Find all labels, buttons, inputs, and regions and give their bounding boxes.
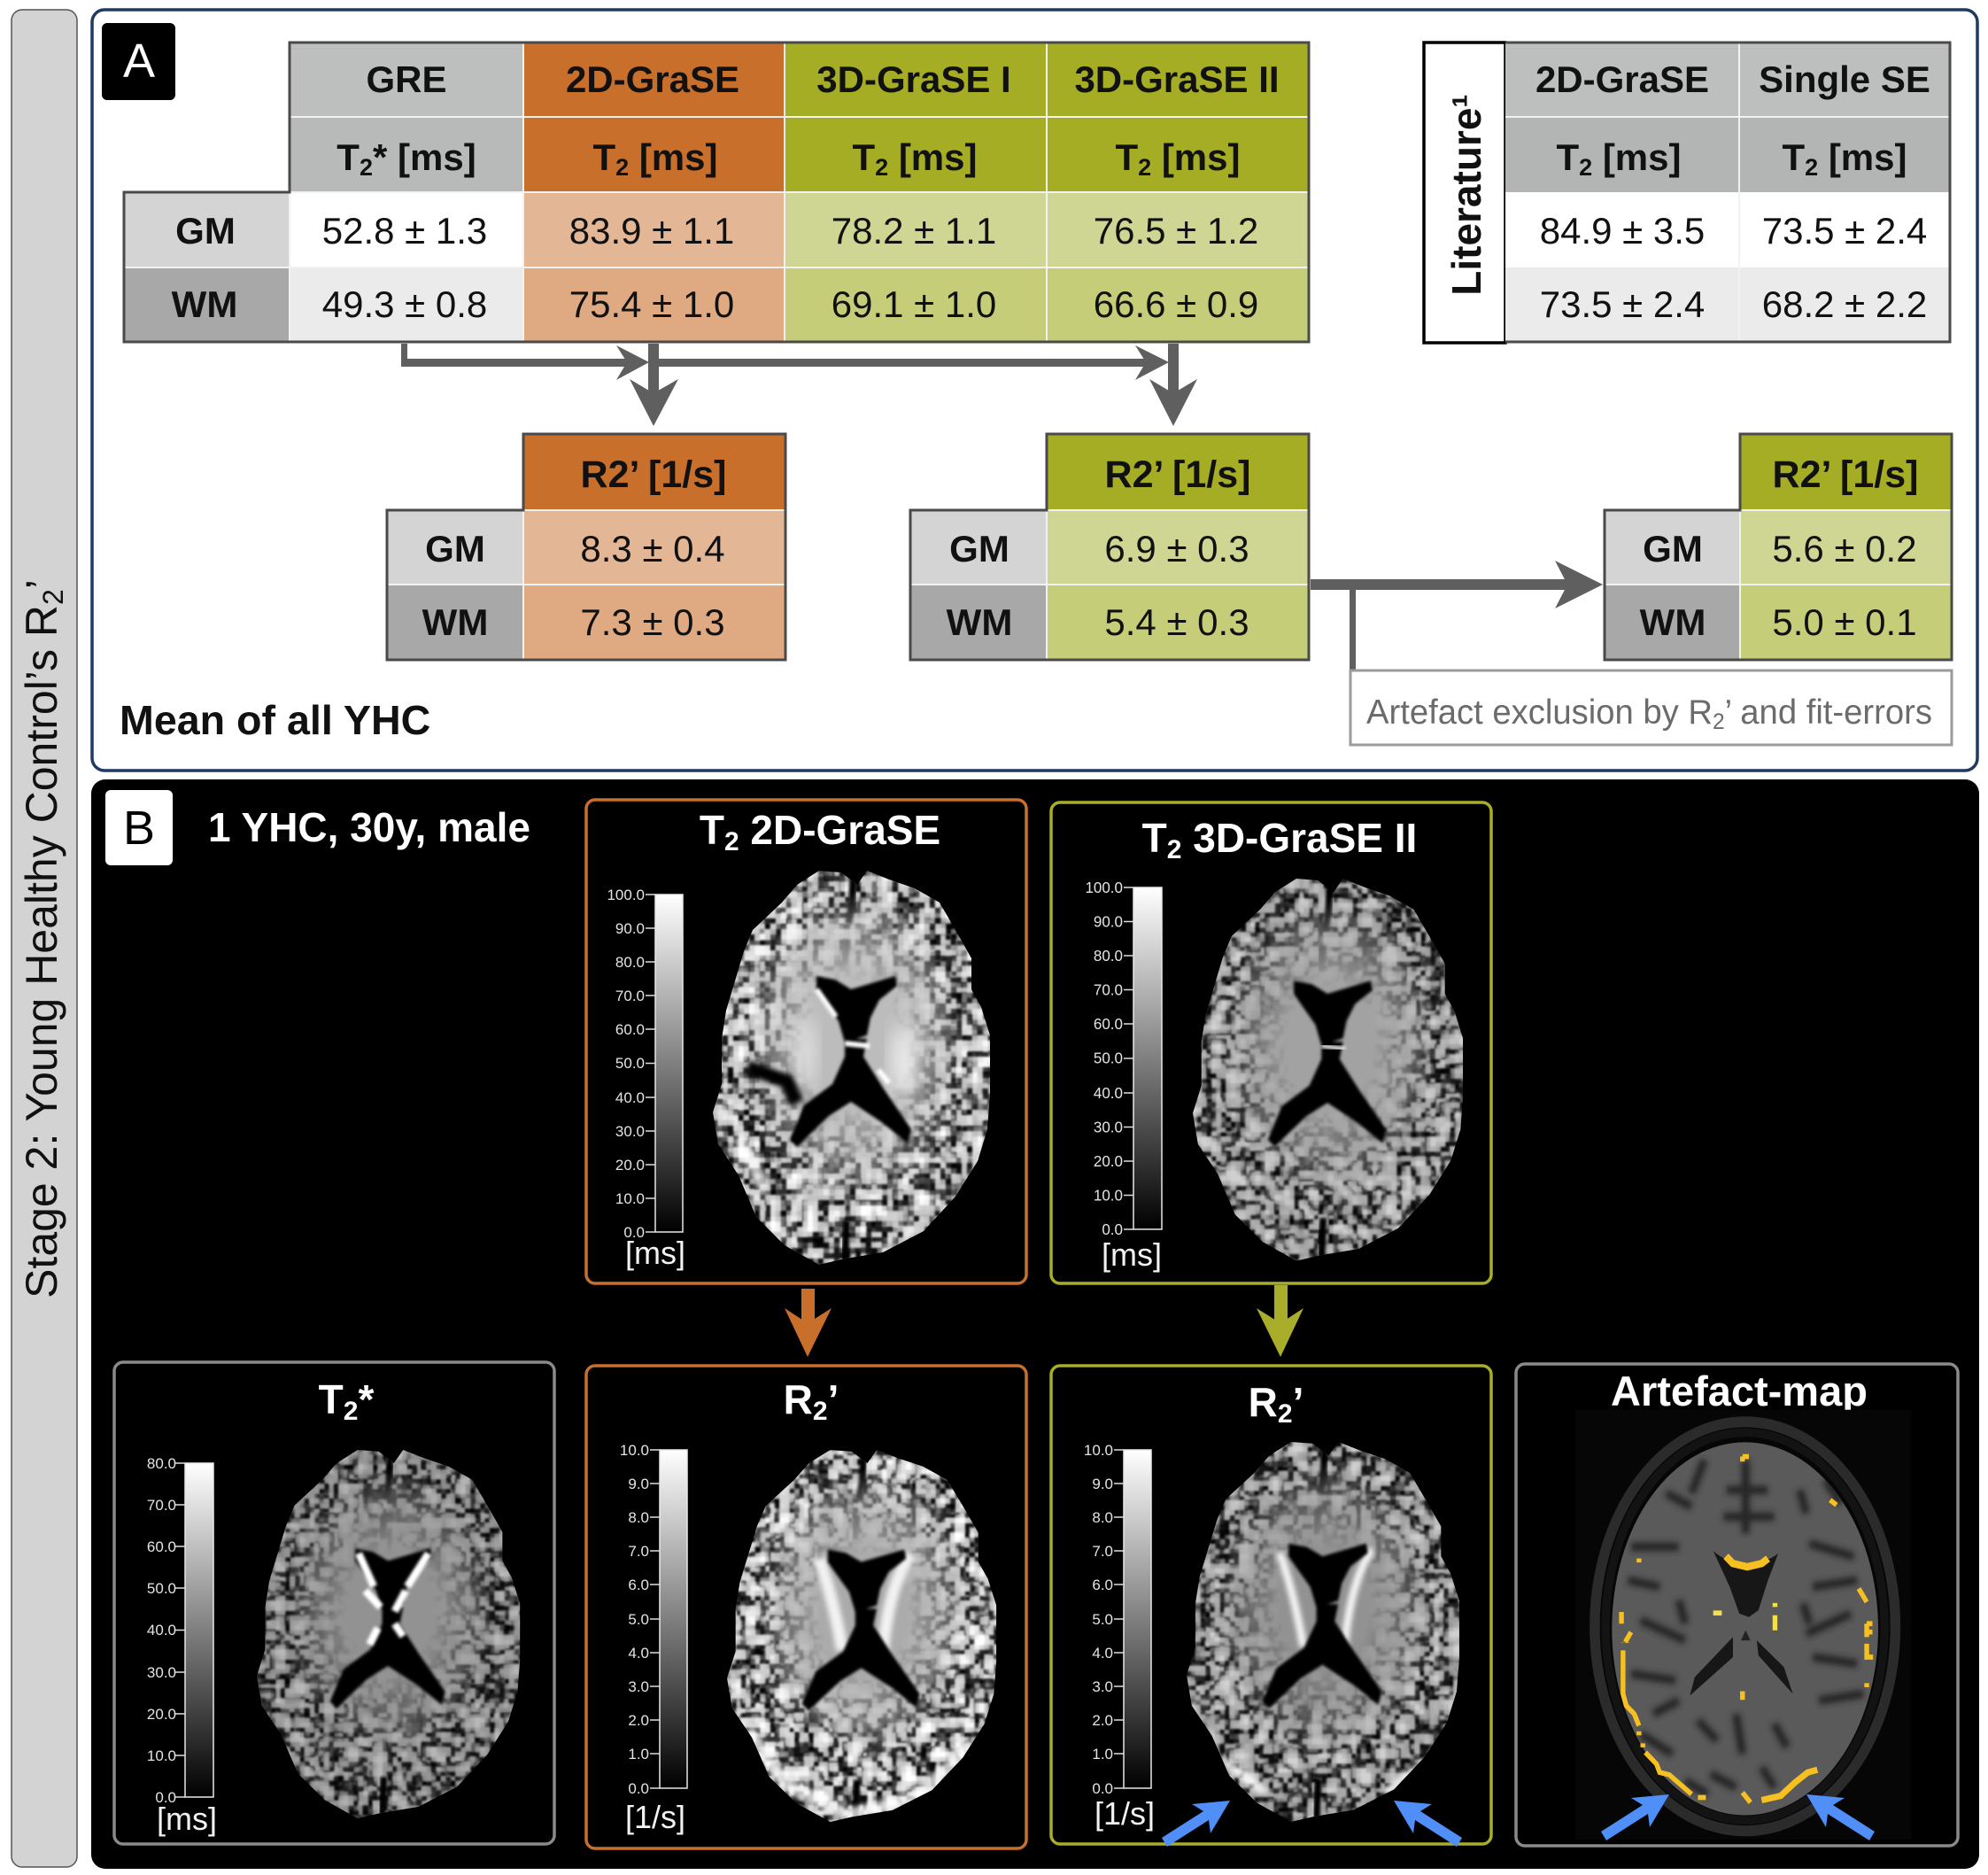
anatomical image (1575, 1410, 1911, 1841)
colour bar: 20.0 (147, 1706, 176, 1723)
table: literature values: 2 (1579, 154, 1592, 181)
table: measured T2 and T2* values: [ms] (629, 136, 718, 178)
map panel: T2 2D-GraSE: 2D-GraSE (739, 807, 940, 853)
map panel: T2 2D-GraSE: T (700, 807, 724, 853)
map panel: artefact map (1516, 1364, 1958, 1846)
table: R2' from 2D-GraSE: WM (422, 601, 488, 643)
colour bar (1085, 879, 1162, 1238)
colour bar: 70.0 (147, 1497, 176, 1514)
table: R2' after artefact exclusion: 5.6 ± 0.2 (1772, 528, 1917, 569)
side label: stage (12, 10, 77, 1867)
colour bar: 6.0 (628, 1577, 649, 1593)
table: R2' after artefact exclusion: WM (1640, 601, 1706, 643)
table: measured T2 and T2* values: 83.9 ± 1.1 (569, 210, 734, 252)
panel letter A: A (123, 35, 155, 88)
table: measured T2 and T2* values: 75.4 ± 1.0 (569, 283, 734, 325)
table: literature values: [ms] (1592, 136, 1682, 178)
table: literature values: 68.2 ± 2.2 (1762, 283, 1927, 325)
panel letter A (102, 23, 175, 100)
colour bar (147, 1455, 213, 1806)
table: measured T2 and T2* values: 66.6 ± 0.9 (1094, 283, 1258, 325)
colour bar: 0.0 (628, 1780, 649, 1797)
table: R2' from 3D-GraSE II (910, 434, 1309, 660)
unit: [ms] (1102, 1236, 1162, 1273)
map panel: T2 2D-GraSE: 2 (724, 827, 739, 856)
table: literature values: 2 (1805, 154, 1818, 181)
map panel: R2' from 3D-GraSE II: 2 (1278, 1399, 1293, 1429)
table: measured T2 and T2* values: 69.1 ± 1.0 (832, 283, 996, 325)
table: measured T2 and T2* values: 2 (615, 154, 629, 181)
arrow: olive (1257, 1285, 1303, 1357)
colour bar: 30.0 (1094, 1119, 1123, 1136)
colour bar: 10.0 (1094, 1187, 1123, 1205)
table: R2' after artefact exclusion (1605, 434, 1952, 660)
colour bar: 30.0 (615, 1123, 645, 1140)
colour bar: 20.0 (615, 1157, 645, 1174)
table: measured T2 and T2* values: [ms] (1151, 136, 1241, 178)
table: literature values: 73.5 ± 2.4 (1540, 283, 1705, 325)
colour bar: 3.0 (1092, 1678, 1113, 1695)
colour bar: 9.0 (1092, 1476, 1113, 1492)
colour bar: 40.0 (615, 1089, 645, 1106)
map panel: R2' from 2D-GraSE: R (784, 1376, 813, 1422)
colour bar: 0.0 (155, 1789, 176, 1806)
brain map (726, 1450, 1010, 1834)
colour bar: 2.0 (1092, 1712, 1113, 1729)
table: measured T2 and T2* values: 3D-GraSE II (1074, 58, 1280, 100)
unit: [1/s] (1095, 1795, 1155, 1832)
arrows: T2 and T2* to R2' (401, 344, 1197, 426)
colour bar: 50.0 (147, 1580, 176, 1597)
table: measured T2 and T2* values: 78.2 ± 1.1 (832, 210, 996, 252)
colour bar: 20.0 (1094, 1153, 1123, 1170)
map panel: R2' from 3D-GraSE II (1051, 1366, 1491, 1847)
colour bar: 70.0 (1094, 981, 1123, 999)
colour bar: 8.0 (628, 1509, 649, 1526)
table: R2' from 2D-GraSE: R2’ [1/s] (581, 453, 726, 496)
table: literature values: T (1556, 136, 1579, 178)
table: measured T2 and T2* values: 2 (875, 154, 888, 181)
colour bar: 7.0 (1092, 1543, 1113, 1560)
colour bar: 60.0 (1094, 1016, 1123, 1033)
arrow: artefact exclusion to corrected R2' (1311, 561, 1603, 670)
colour bar: 10.0 (615, 1190, 645, 1207)
colour bar: 10.0 (620, 1442, 649, 1459)
table: measured T2 and T2* values: 76.5 ± 1.2 (1094, 210, 1258, 252)
colour bar: 9.0 (628, 1476, 649, 1492)
callout: artefact exclusion (1350, 670, 1952, 745)
colour bar: 40.0 (1094, 1085, 1123, 1102)
colour bar: 80.0 (615, 954, 645, 971)
table: measured T2 and T2* values: T (852, 136, 875, 178)
map panel: artefact map: Artefact-map (1611, 1368, 1868, 1414)
panel letter B (105, 790, 173, 865)
map panel: R2' from 2D-GraSE (586, 1366, 1026, 1848)
table: R2' from 3D-GraSE II: GM (949, 528, 1009, 569)
table: measured T2 and T2* values: [ms] (888, 136, 978, 178)
artefact voxels (1621, 1457, 1873, 1802)
map panel: T2*: 2 (344, 1397, 358, 1426)
panel B: single subject maps (91, 779, 1979, 1869)
table: literature values: [ms] (1818, 136, 1907, 178)
table: measured T2 and T2* values: T (1115, 136, 1138, 178)
colour bar: 10.0 (147, 1747, 176, 1764)
colour bar: 100.0 (1085, 879, 1123, 896)
table: measured T2 and T2* values: 2 (1138, 154, 1151, 181)
callout: artefact exclusion: Artefact exclusion by R (1366, 693, 1720, 732)
table: measured T2 and T2* values: 2 (360, 154, 373, 181)
arrow: orange (785, 1289, 832, 1357)
map panel: T2* (114, 1362, 554, 1844)
table: R2' from 2D-GraSE: 7.3 ± 0.3 (580, 601, 725, 643)
unit: [ms] (157, 1801, 217, 1837)
table: literature values: 2D-GraSE (1535, 58, 1709, 100)
map panel: T2 3D-GraSE II (1051, 802, 1491, 1283)
table: measured T2 and T2* values: 3D-GraSE I (816, 58, 1011, 100)
colour bar: 70.0 (615, 988, 645, 1004)
colour bar: 8.0 (1092, 1509, 1113, 1526)
map panel: R2' from 3D-GraSE II: ’ (1293, 1379, 1303, 1425)
colour bar: 100.0 (607, 887, 645, 903)
colour bar: 0.0 (1102, 1221, 1123, 1238)
colour bar: 5.0 (628, 1611, 649, 1628)
map panel: R2' from 3D-GraSE II: R (1249, 1379, 1278, 1425)
table: R2' after artefact exclusion: R2’ [1/s] (1773, 453, 1918, 496)
map panel: T2 3D-GraSE II: 2 (1167, 835, 1181, 864)
table: measured T2 and T2* values: * [ms] (373, 136, 476, 178)
table: measured T2 and T2* values: T (336, 136, 360, 178)
arrows: blue, artefact map (1601, 1794, 1875, 1840)
colour bar: 50.0 (1094, 1050, 1123, 1067)
side label: stage: 2 (37, 589, 69, 605)
table: R2' from 3D-GraSE II: 5.4 ± 0.3 (1104, 601, 1249, 643)
table: measured T2 and T2* values: WM (172, 283, 237, 325)
colour bar (620, 1442, 687, 1797)
table: R2' from 3D-GraSE II: R2’ [1/s] (1105, 453, 1250, 496)
colour bar: 4.0 (628, 1645, 649, 1662)
map panel: T2*: * (358, 1376, 374, 1422)
map panel: T2 3D-GraSE II: 3D-GraSE II (1181, 815, 1417, 861)
colour bar: 2.0 (628, 1712, 649, 1729)
brain map (256, 1450, 533, 1831)
brain map (712, 871, 1004, 1278)
table: measured T2 and T2* values: 49.3 ± 0.8 (322, 283, 487, 325)
colour bar: 1.0 (628, 1746, 649, 1763)
colour bar: 1.0 (1092, 1746, 1113, 1763)
colour bar: 7.0 (628, 1543, 649, 1560)
map panel: T2 3D-GraSE II: T (1142, 815, 1167, 861)
table: R2' from 3D-GraSE II: WM (947, 601, 1012, 643)
colour bar: 0.0 (623, 1224, 645, 1241)
colour bar: 80.0 (147, 1455, 176, 1472)
colour bar: 0.0 (1092, 1780, 1113, 1797)
colour bar: 30.0 (147, 1664, 176, 1681)
table: R2' from 2D-GraSE (387, 434, 785, 660)
map panel: R2' from 2D-GraSE: ’ (828, 1376, 839, 1422)
table: literature values: T (1782, 136, 1805, 178)
side label: stage: Stage 2: Young Healthy Control’s R (17, 605, 66, 1298)
table: R2' from 2D-GraSE: GM (425, 528, 485, 569)
colour bar: 6.0 (1092, 1577, 1113, 1593)
table: measured T2 and T2* values: 52.8 ± 1.3 (322, 210, 487, 252)
table: literature values: Literature¹ (1443, 94, 1489, 296)
table: literature values: 84.9 ± 3.5 (1540, 210, 1705, 252)
panel letter B: B (123, 802, 155, 855)
table: measured T2 and T2* values (124, 43, 1309, 342)
unit: [ms] (625, 1235, 685, 1271)
table: R2' after artefact exclusion: 5.0 ± 0.1 (1772, 601, 1917, 643)
colour bar: 80.0 (1094, 948, 1123, 965)
colour bar: 40.0 (147, 1622, 176, 1639)
callout: artefact exclusion: ’ and fit-errors (1725, 693, 1932, 732)
colour bar: 4.0 (1092, 1645, 1113, 1662)
colour bar: 60.0 (147, 1538, 176, 1555)
brain map (1192, 879, 1477, 1274)
table: measured T2 and T2* values: T (592, 136, 615, 178)
colour bar: 60.0 (615, 1021, 645, 1038)
table: measured T2 and T2* values: GRE (366, 58, 447, 100)
arrows: blue, R2' map (1162, 1801, 1462, 1847)
map panel: R2' from 2D-GraSE: 2 (813, 1397, 828, 1426)
colour bar: 50.0 (615, 1055, 645, 1072)
colour bar: 3.0 (628, 1678, 649, 1695)
table: literature values: Single SE (1759, 58, 1930, 100)
colour bar (607, 887, 683, 1241)
colour bar: 5.0 (1092, 1611, 1113, 1628)
table: R2' after artefact exclusion: GM (1643, 528, 1703, 569)
table: R2' from 3D-GraSE II: 6.9 ± 0.3 (1104, 528, 1249, 569)
table: literature values: 73.5 ± 2.4 (1762, 210, 1927, 252)
table: literature values (1424, 43, 1950, 343)
unit: [1/s] (625, 1799, 685, 1835)
colour bar: 10.0 (1084, 1442, 1113, 1459)
table: measured T2 and T2* values: 2D-GraSE (566, 58, 739, 100)
colour bar: 90.0 (615, 920, 645, 937)
caption: mean of all YHC: Mean of all YHC (120, 697, 430, 743)
brain map (1186, 1442, 1474, 1834)
table: measured T2 and T2* values: GM (175, 210, 236, 252)
table: R2' from 2D-GraSE: 8.3 ± 0.4 (580, 528, 725, 569)
map panel: T2 2D-GraSE (586, 800, 1026, 1283)
subject caption: 1 YHC, 30y, male (208, 804, 530, 850)
colour bar (1084, 1442, 1151, 1797)
colour bar: 90.0 (1094, 913, 1123, 931)
panel A: mean of all YHC (92, 10, 1977, 771)
map panel: T2*: T (319, 1376, 344, 1422)
side label: stage: ’ (17, 579, 66, 589)
callout: artefact exclusion: 2 (1713, 709, 1725, 734)
